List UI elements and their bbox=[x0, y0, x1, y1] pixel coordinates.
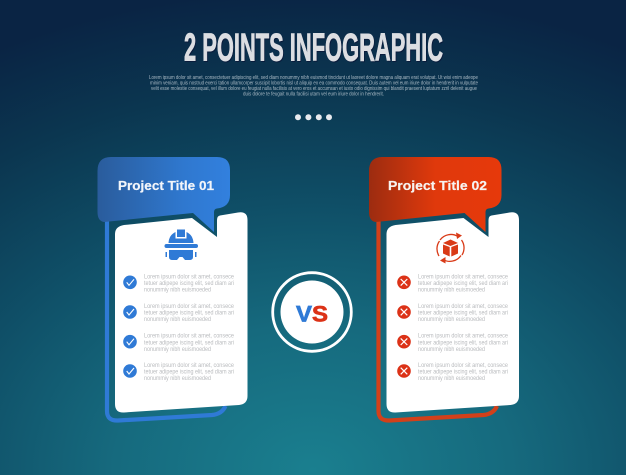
item 1 bbox=[123, 273, 234, 294]
intro paragraph: velit esse molestie consequat, vel illum dolore eu feugiat nulla facilisis at vero eros et accumsan et iusto odio dignissim qui blandit praesent luptatum zzril delenit augue bbox=[151, 86, 477, 92]
intro paragraph: Lorem ipsum dolor sit amet, consectetuer adipiscing elit, sed diam nonummy nibh euismod tincidunt ut laoreet dolore magna aliquam erat volutpat. Ut wisi enim adeope bbox=[149, 75, 478, 81]
item 2: Lorem ipsum dolor sit amet, consece bbox=[418, 303, 508, 310]
item 3: nonummiy nibh euismoeded bbox=[144, 346, 211, 353]
item 3: Lorem ipsum dolor sit amet, consece bbox=[144, 333, 234, 340]
item 4 bbox=[397, 362, 508, 382]
item 2: nonummiy nibh euismoeded bbox=[418, 316, 485, 323]
item 3 bbox=[397, 333, 508, 353]
item 2 bbox=[123, 303, 234, 323]
intro paragraph bbox=[149, 75, 478, 98]
item 4: nonummiy nibh euismoeded bbox=[418, 375, 485, 382]
item 1 bbox=[397, 273, 508, 294]
panel: project 02 bbox=[369, 157, 519, 421]
item 4: tetuer adipepe iscing elit, sed diam ari bbox=[418, 369, 508, 376]
pagination dots bbox=[295, 114, 332, 120]
speech bubble header bbox=[369, 157, 502, 232]
item 1: nonummiy nibh euismoeded bbox=[418, 286, 485, 294]
white card bbox=[115, 212, 248, 413]
item 2: tetuer adipepe iscing elit, sed diam ari bbox=[144, 310, 234, 317]
item 2: nonummiy nibh euismoeded bbox=[144, 316, 211, 323]
vs badge bbox=[273, 273, 351, 351]
item 4: Lorem ipsum dolor sit amet, consece bbox=[144, 362, 234, 369]
speech bubble header bbox=[98, 157, 230, 232]
item 2 bbox=[397, 303, 508, 323]
heading: Project Title 02 bbox=[388, 178, 487, 193]
intro paragraph: minim veniam, quis nostrud exerci tation ullamcorper suscipit lobortis nisl ut aliquip ex ea commodo consequat. Duis autem vel eum iriure dolor in hendrerit in vulputate bbox=[150, 80, 478, 86]
panel: project 01 bbox=[98, 157, 248, 421]
item 1: tetuer adipepe iscing elit, sed diam ari bbox=[144, 280, 234, 287]
item 1: nonummiy nibh euismoeded bbox=[144, 286, 211, 294]
item 1: Lorem ipsum dolor sit amet, consece bbox=[418, 273, 508, 280]
card outline frame bbox=[107, 218, 226, 421]
item 1: tetuer adipepe iscing elit, sed diam ari bbox=[418, 280, 508, 287]
icon: box with rotating arrows bbox=[437, 232, 464, 264]
item 4: Lorem ipsum dolor sit amet, consece bbox=[418, 362, 508, 369]
item 2: Lorem ipsum dolor sit amet, consece bbox=[144, 303, 234, 310]
title bbox=[184, 26, 444, 70]
item 2: tetuer adipepe iscing elit, sed diam ari bbox=[418, 310, 508, 317]
heading: Project Title 01 bbox=[118, 178, 214, 193]
intro paragraph: duis dolore te feugait nulla facilisi utam vel eum iriure dolor in hendrerit. bbox=[243, 92, 384, 98]
white card bbox=[386, 212, 519, 413]
item 3 bbox=[123, 333, 234, 353]
item 3: tetuer adipepe iscing elit, sed diam ari bbox=[418, 339, 508, 346]
card outline frame bbox=[378, 218, 497, 421]
item 4 bbox=[123, 362, 234, 382]
item 1: Lorem ipsum dolor sit amet, consece bbox=[144, 273, 234, 280]
vs badge: VS bbox=[296, 302, 328, 326]
item 3: nonummiy nibh euismoeded bbox=[418, 346, 485, 353]
item 3: Lorem ipsum dolor sit amet, consece bbox=[418, 333, 508, 340]
item 4: tetuer adipepe iscing elit, sed diam ari bbox=[144, 369, 234, 376]
icon: helmet with goggles bbox=[164, 230, 198, 260]
item 3: tetuer adipepe iscing elit, sed diam ari bbox=[144, 339, 234, 346]
item 4: nonummiy nibh euismoeded bbox=[144, 375, 211, 382]
